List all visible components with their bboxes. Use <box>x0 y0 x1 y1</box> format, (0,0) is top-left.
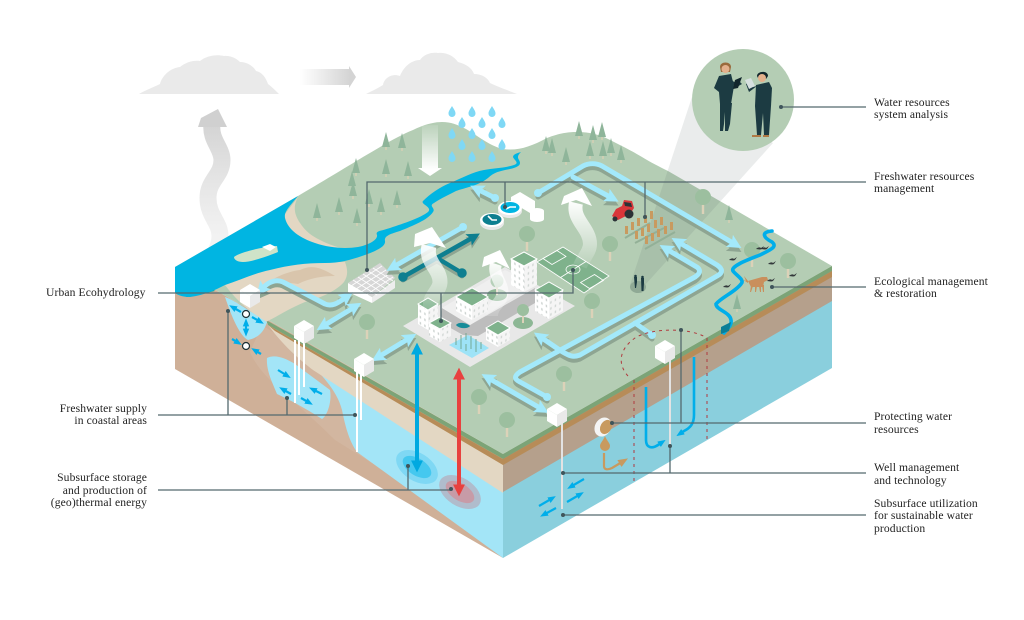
label: water resources system analysis: system analysis <box>874 108 948 121</box>
pipe: to treatment <box>479 190 495 198</box>
leader: freshwater supply <box>158 309 357 417</box>
wells <box>240 284 675 509</box>
cube: well <box>655 340 675 364</box>
contamination ring and drop <box>591 414 622 469</box>
settling tank <box>480 213 504 230</box>
pipe: double arrow <box>325 308 353 325</box>
leader: water resources system analysis <box>779 105 866 109</box>
label: freshwater resources management: management <box>874 182 935 195</box>
white rising arrows <box>414 188 592 316</box>
label: protecting water resources: resources <box>874 423 919 436</box>
leader: freshwater resources management <box>365 182 866 272</box>
label: freshwater resources management: Freshwater resources <box>874 170 974 183</box>
building <box>535 282 563 319</box>
cube: coastal well <box>240 284 260 308</box>
warm storage <box>433 468 487 516</box>
building <box>511 252 537 292</box>
crops <box>625 211 675 249</box>
figure: woman <box>714 62 742 131</box>
label: subsurface utilization: Subsurface utilization <box>874 497 978 510</box>
cloud left <box>139 55 279 94</box>
aquifer lens <box>267 320 331 419</box>
house with solar roof <box>348 263 395 303</box>
sea and river <box>175 152 521 297</box>
cube: well <box>294 320 314 344</box>
river mouth <box>721 322 731 334</box>
cube: well <box>354 353 374 377</box>
panel: analysts circle <box>692 49 794 151</box>
football pitch <box>537 247 609 293</box>
teal waste water pipes <box>400 238 472 280</box>
arrow: evapotranspiration 1 <box>414 227 446 312</box>
pipe: branch to well <box>635 323 652 335</box>
label: ecological management and restoration: Ecological management <box>874 275 988 288</box>
conifer forest <box>313 121 741 312</box>
treatment plant <box>480 192 544 230</box>
pipes: shadows <box>263 168 733 412</box>
building <box>429 317 451 342</box>
label: urban ecohydrology: Urban Ecohydrology <box>46 286 146 299</box>
arrow: blue double <box>415 351 419 464</box>
beige layer <box>266 322 503 493</box>
thermal storage <box>390 351 487 516</box>
sea edge <box>175 267 215 297</box>
label: subsurface storage and production: (geo)thermal energy <box>51 496 147 509</box>
leader: urban ecohydrology <box>158 268 575 323</box>
well flow lines <box>646 357 694 447</box>
tractor <box>612 200 634 222</box>
pipes: water network <box>263 164 733 408</box>
small people <box>630 275 646 293</box>
label: well management and technology: Well management <box>874 461 959 474</box>
arrow: red double <box>457 376 461 488</box>
building <box>456 288 488 320</box>
round trees <box>359 189 796 437</box>
building <box>486 321 510 347</box>
leader lines <box>158 105 866 517</box>
reed pond <box>449 333 489 358</box>
cold storage <box>390 443 444 491</box>
subsurface flow arrows <box>539 479 584 514</box>
clouds <box>139 53 517 94</box>
car <box>456 323 470 328</box>
rain drops <box>448 106 506 162</box>
label: protecting water resources: Protecting water <box>874 410 952 423</box>
pipe ends <box>459 189 656 401</box>
building <box>418 298 438 330</box>
cone: view from analysts <box>630 97 773 290</box>
river right <box>716 231 774 333</box>
aquifer water <box>317 370 503 558</box>
label: well management and technology: and technology <box>874 474 947 487</box>
leader: ecological management <box>770 285 866 289</box>
side face: right <box>503 266 832 558</box>
label: subsurface storage and production: Subsurface storage <box>57 471 147 484</box>
pipe: inner return <box>542 243 722 356</box>
leader: subsurface utilization <box>561 513 866 517</box>
road <box>440 288 535 336</box>
settling tank <box>498 201 522 218</box>
side face: left <box>175 267 503 558</box>
ship <box>234 244 278 262</box>
arrow: infiltration down <box>418 125 442 176</box>
label: freshwater supply in coastal areas: in coastal areas <box>74 414 147 427</box>
arrow: cloud drift <box>300 66 356 88</box>
leader: protecting water <box>610 328 866 425</box>
pipe: branch to tractor <box>573 177 610 197</box>
arrow: evaporation rising <box>198 109 227 276</box>
deer <box>742 276 768 292</box>
cube: well <box>547 403 567 427</box>
pipe: upper loop <box>538 164 733 243</box>
white well shafts <box>357 370 361 452</box>
teal waste water pipes shadow <box>403 241 472 280</box>
figure: man <box>745 72 772 137</box>
pipe: coastal curve <box>263 281 345 305</box>
leader: subsurface storage <box>158 464 453 491</box>
sand dunes <box>225 197 347 322</box>
label: freshwater supply in coastal areas: Freshwater supply <box>60 402 147 415</box>
pipe: river to town <box>395 227 463 266</box>
city block <box>403 252 575 367</box>
label: subsurface utilization: production <box>874 522 925 535</box>
leader: well management <box>561 444 866 475</box>
label: subsurface utilization: for sustainable water <box>874 509 973 522</box>
protection zone dashed <box>621 330 707 482</box>
label: water resources system analysis: Water resources <box>874 96 950 109</box>
birds <box>723 246 797 287</box>
arrow: evapotranspiration 3 <box>561 188 592 266</box>
pipe: outer return <box>516 250 700 397</box>
label: ecological management and restoration: & restoration <box>874 287 937 300</box>
coastal lens water <box>225 297 267 354</box>
pipe: to well corner <box>490 379 540 408</box>
pipe: double arrow <box>380 339 408 356</box>
grey well shafts <box>562 358 670 509</box>
cloud right <box>366 53 517 94</box>
label: subsurface storage and production: and production of <box>63 484 147 497</box>
land surface with hills <box>175 122 832 454</box>
park tree 2 <box>513 304 533 329</box>
park tree <box>487 274 507 301</box>
arrow: evapotranspiration 2 <box>482 250 510 316</box>
plant building <box>511 192 544 222</box>
